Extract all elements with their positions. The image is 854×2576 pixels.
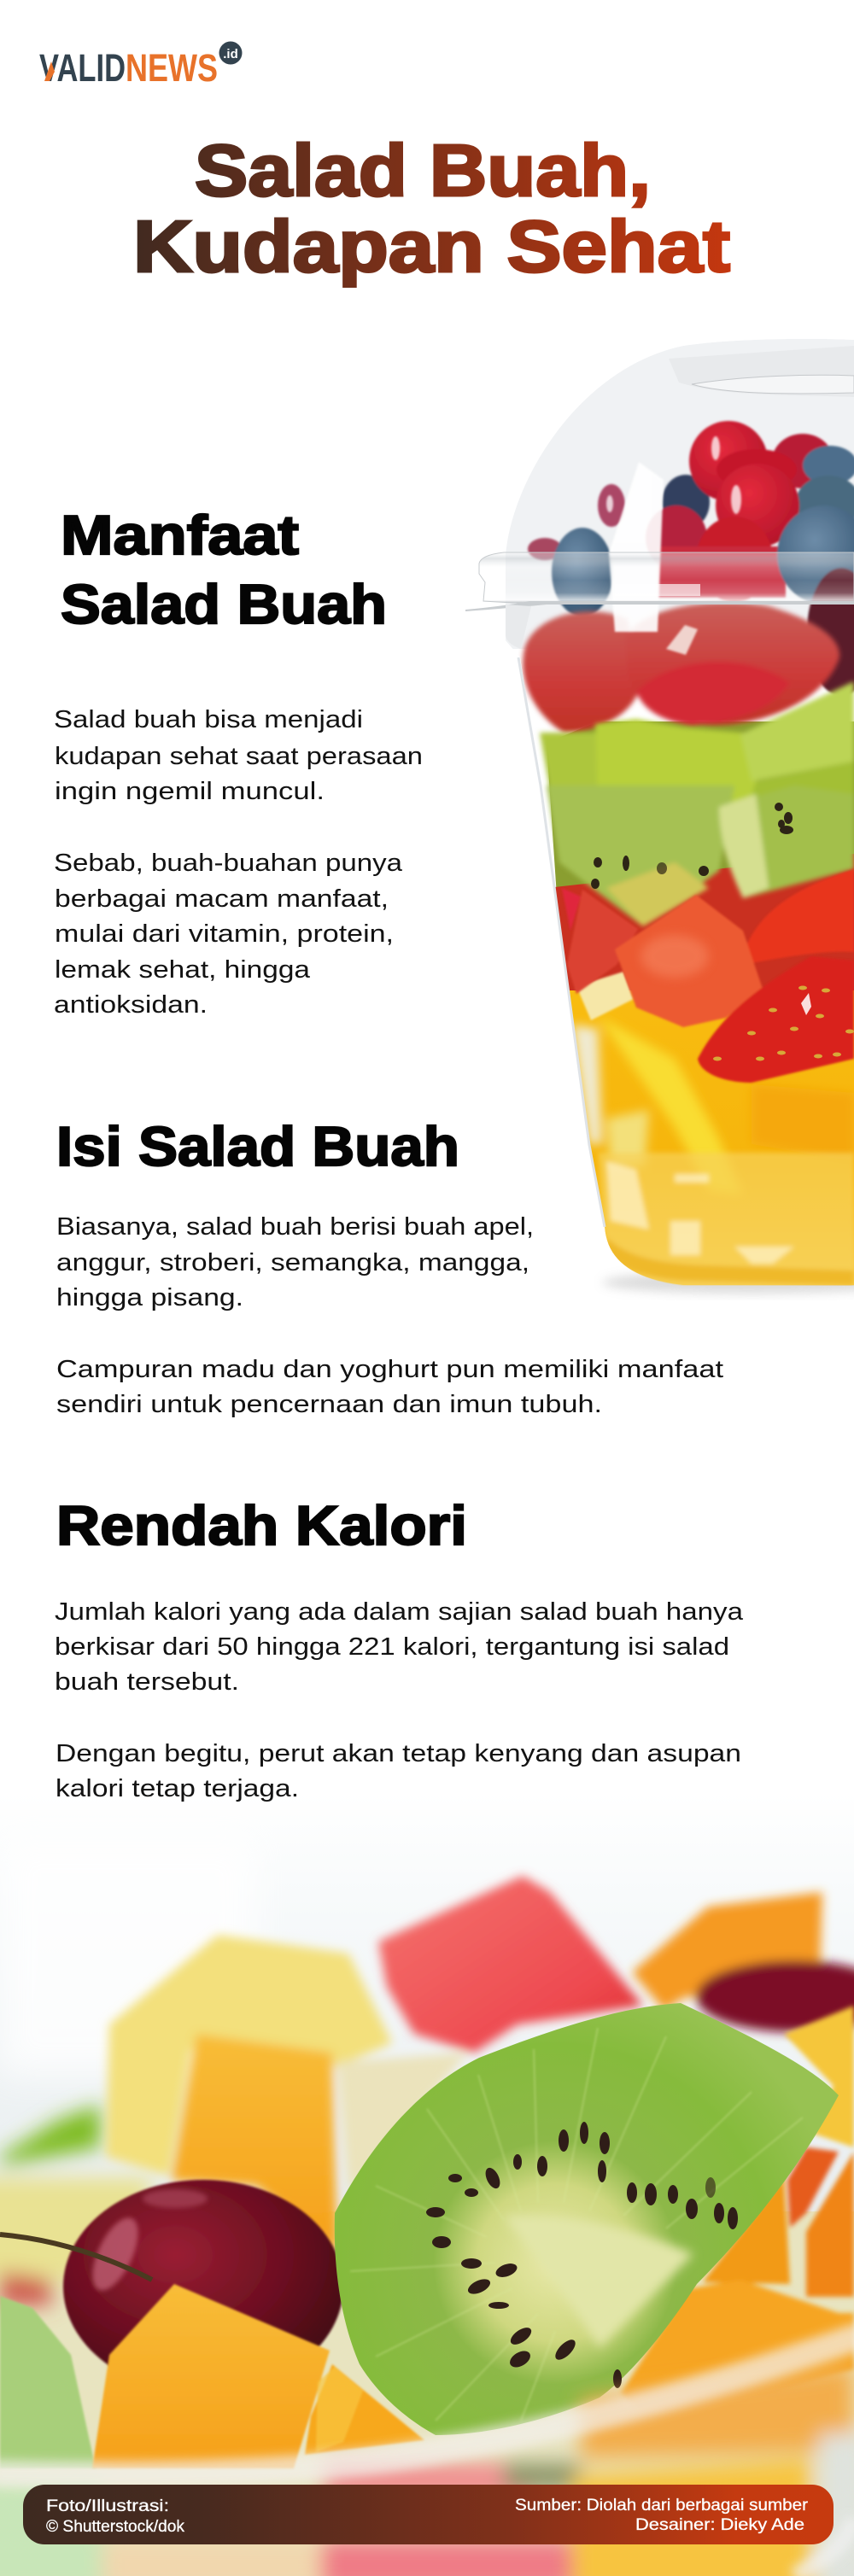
body text: sendiri untuk pencernaan dan imun tubuh. (56, 1391, 602, 1418)
red fruit layer (562, 869, 854, 1083)
logo badge: .id (219, 41, 243, 65)
body text: kudapan sehat saat perasaan (55, 743, 423, 770)
illustration: fruit salad cup (465, 339, 854, 1294)
kiwi layer (540, 681, 854, 926)
heading: Salad Buah (61, 573, 387, 635)
body text: mulai dari vitamin, protein, (55, 920, 394, 948)
body text: anggur, stroberi, semangka, mangga, (56, 1249, 529, 1276)
dome lid (502, 339, 854, 649)
title: Salad Buah, (195, 131, 651, 212)
fruit base fills (547, 721, 854, 887)
body text: antioksidan. (54, 991, 208, 1019)
section: Isi Salad Buah (56, 1115, 723, 1418)
melon slice (0, 2296, 96, 2468)
section: Rendah Kalori (55, 1494, 743, 1802)
footer credit: photo (46, 2497, 185, 2536)
blurred bowl foreground (0, 2365, 854, 2576)
body text: Campuran madu dan yoghurt pun memiliki manfaat (56, 1356, 723, 1383)
cup rim (465, 552, 854, 611)
lid reflection (609, 462, 664, 632)
kiwi slice (335, 2003, 839, 2435)
body text: Salad buah bisa menjadi (54, 706, 363, 733)
footer credit: photo: Foto/Illustrasi: (46, 2497, 169, 2515)
mango chunks (92, 2284, 424, 2468)
logo badge: .id: .id (223, 47, 238, 61)
photo: fruit salad close-up (0, 1793, 854, 2576)
body text: Sebab, buah-buahan punya (54, 850, 402, 877)
body text: buah tersebut. (55, 1668, 239, 1696)
logo: Validnews.id (39, 41, 243, 90)
footer bar (23, 2485, 834, 2544)
title (133, 131, 730, 288)
kiwi seeds (426, 2122, 738, 2388)
grapes (523, 603, 839, 733)
body text: berkisar dari 50 hingga 221 kalori, tergantung isi salad (55, 1633, 729, 1661)
cherry (0, 2178, 342, 2367)
berry highlights (606, 436, 741, 514)
body text: kalori tetap terjaga. (56, 1775, 299, 1802)
heading: Manfaat (61, 504, 299, 566)
footer credit: source and designer (515, 2497, 809, 2534)
footer credit: source and designer: Desainer: Dieky Ade (635, 2516, 804, 2534)
cup shadow (602, 1271, 854, 1294)
blurred background fruit (0, 2105, 154, 2305)
body text (55, 1598, 743, 1802)
glass bowl rim (0, 2335, 854, 2474)
cup wall (518, 657, 605, 1227)
strawberry seeds (713, 985, 854, 1060)
kiwi seeds (591, 803, 793, 889)
berries (528, 421, 854, 696)
body text: Biasanya, salad buah berisi buah apel, (56, 1213, 534, 1241)
kiwi rays (350, 2028, 803, 2421)
body text: hingga pisang. (56, 1284, 243, 1311)
yellow fruit layer (564, 990, 854, 1285)
lid top recess (669, 346, 854, 397)
footer credit: source and designer: Sumber: Diolah dari berbagai sumber (515, 2497, 809, 2515)
body text: Jumlah kalori yang ada dalam sajian salad buah hanya (55, 1598, 743, 1626)
body text (56, 1213, 723, 1418)
body text: berbagai macam manfaat, (55, 885, 389, 913)
heading: Isi Salad Buah (56, 1115, 459, 1177)
photo background (0, 1908, 854, 2211)
lid skirt (506, 605, 531, 649)
body text: lemak sehat, hingga (55, 956, 310, 984)
section: Manfaat Salad Buah (54, 504, 423, 1019)
logo wordmark: VALID: VALID (39, 46, 126, 90)
glass base (598, 1153, 854, 1285)
footer credit: photo: © Shutterstock/dok (46, 2518, 185, 2536)
body text: ingin ngemil muncul. (55, 778, 325, 805)
heading: Rendah Kalori (56, 1494, 467, 1557)
body text: Dengan begitu, perut akan tetap kenyang dan asupan (56, 1740, 741, 1767)
heading (61, 504, 387, 635)
body text (54, 706, 423, 1019)
title: Kudapan Sehat (133, 207, 730, 288)
kiwi core (504, 2216, 693, 2348)
logo wordmark: NEWS: NEWS (126, 46, 218, 90)
